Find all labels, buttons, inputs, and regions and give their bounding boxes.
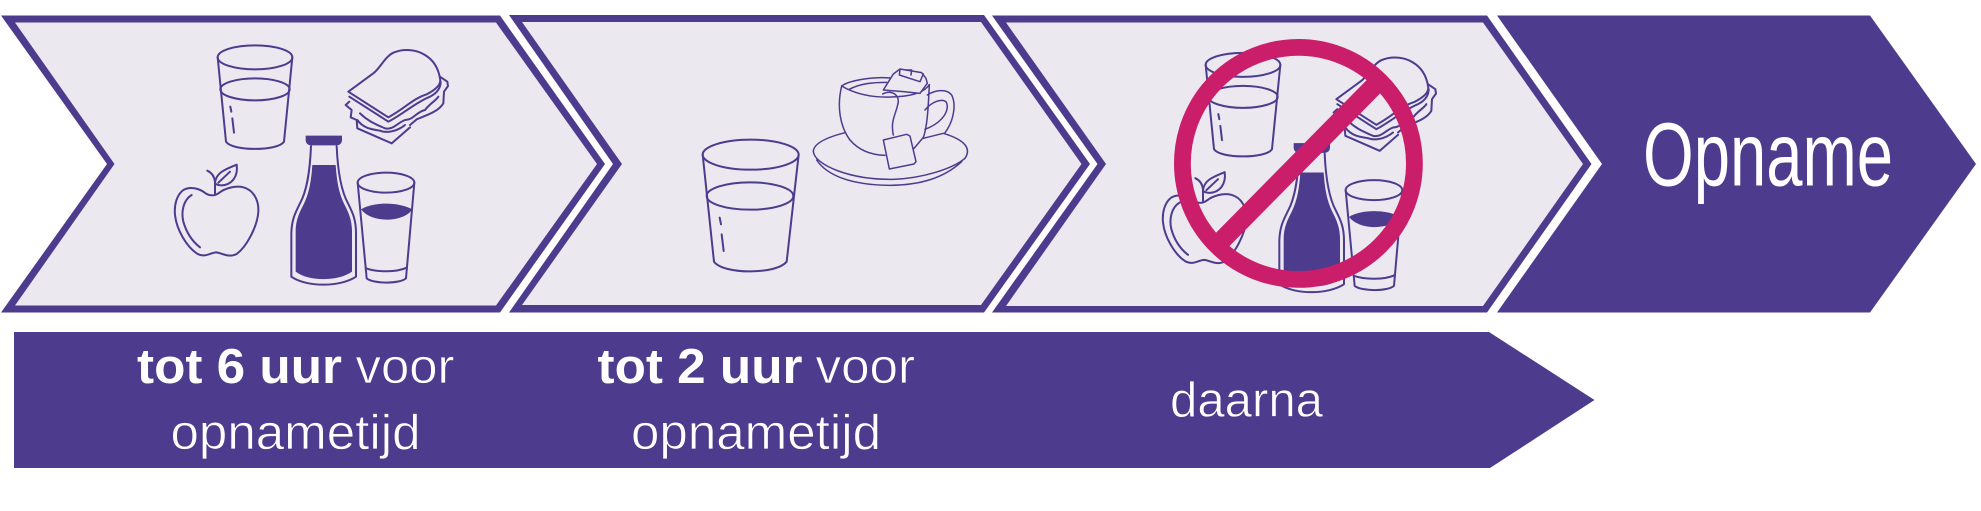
text: tot 2 uur voor opnametijd: opnametijd bbox=[631, 406, 881, 460]
icon: drinks, sandwich and apple bbox=[175, 45, 448, 285]
text: tot 2 uur voor opnametijd: voor bbox=[816, 340, 915, 394]
heading: Opname: Opname bbox=[1643, 106, 1893, 206]
panel: Opname bbox=[1497, 16, 1976, 312]
text: tot 6 uur voor opnametijd: opnametijd bbox=[170, 406, 420, 460]
panel: daarna bbox=[992, 16, 1592, 312]
text: tot 6 uur voor opnametijd: tot 6 uur bbox=[137, 340, 342, 394]
text: tot 2 uur voor opnametijd bbox=[598, 340, 915, 460]
text: tot 2 uur voor opnametijd: tot 2 uur bbox=[598, 340, 802, 394]
text: daarna: daarna bbox=[1170, 374, 1324, 428]
icon: prohibition sign bbox=[1182, 47, 1414, 279]
icon: cup of tea on saucer bbox=[813, 69, 967, 185]
icon: drinks, sandwich and apple (forbidden) bbox=[1163, 53, 1436, 292]
panel: tot 2 uur bbox=[509, 15, 1090, 312]
arrow: time line bbox=[14, 332, 1594, 468]
text: tot 6 uur voor opnametijd bbox=[137, 340, 454, 460]
panel: tot 6 uur bbox=[1, 16, 605, 312]
icon: glass of water bbox=[703, 140, 799, 271]
text: tot 6 uur voor opnametijd: voor bbox=[356, 340, 454, 394]
